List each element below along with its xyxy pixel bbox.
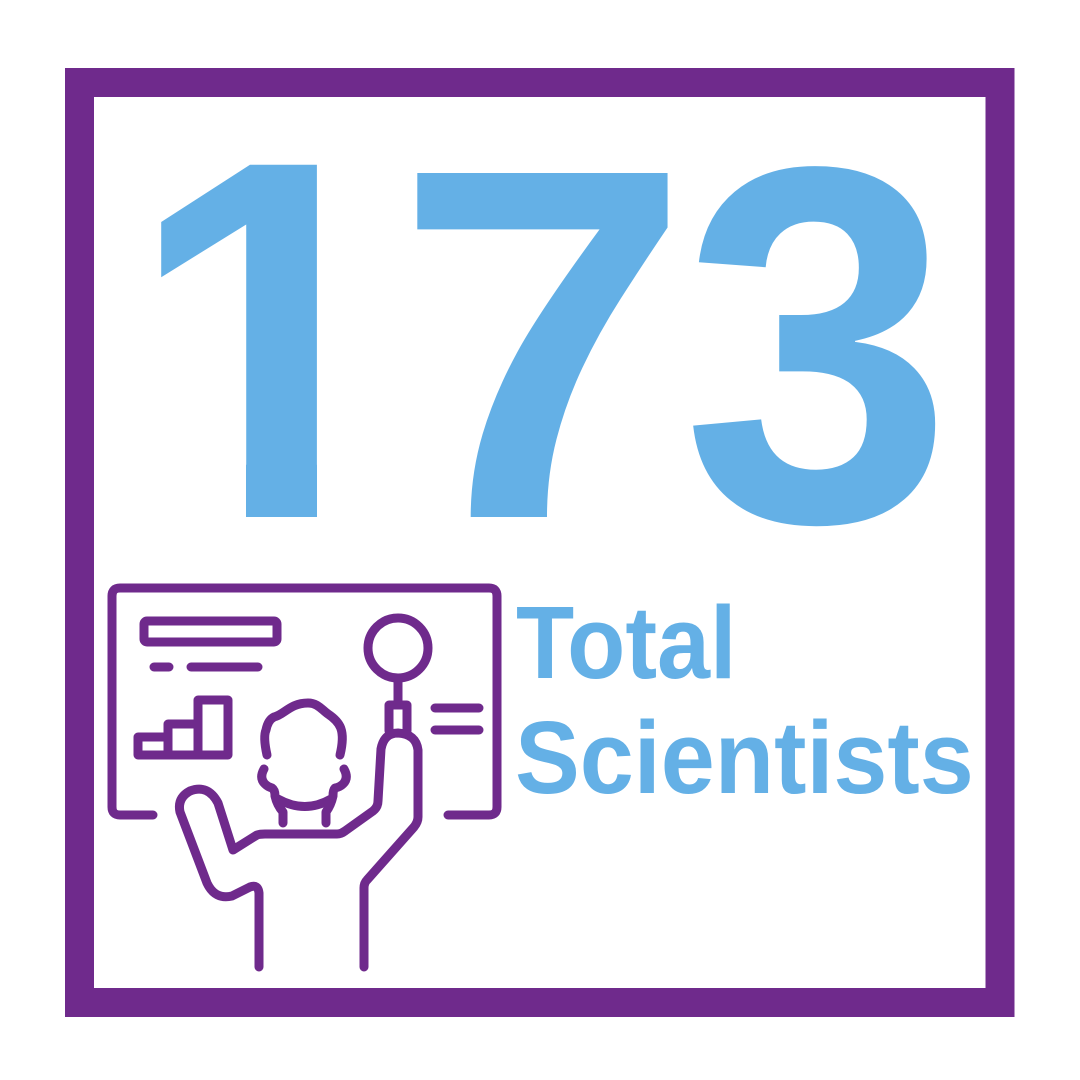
bar chart xyxy=(138,700,228,755)
board outline xyxy=(112,588,497,815)
board title bar xyxy=(144,621,277,642)
big number: 173: 1 xyxy=(126,53,412,626)
icon: scientist presenting at a board xyxy=(112,588,497,967)
big number: 173: 3 xyxy=(682,62,953,629)
big number: 173 xyxy=(126,53,953,629)
side text lines xyxy=(435,708,479,730)
person hair xyxy=(265,703,342,755)
person ears and jaw xyxy=(262,769,346,823)
board text lines xyxy=(154,662,258,672)
label: Total Scientists xyxy=(515,586,974,816)
magnifier handle xyxy=(389,680,407,731)
magnifier lens xyxy=(368,618,428,678)
big number: 173: 7 xyxy=(394,64,691,623)
label: Total Scientists: Total xyxy=(516,586,736,701)
person arms and torso xyxy=(179,733,418,967)
panel: purple framed border xyxy=(80,82,1000,1002)
label: Total Scientists: Scientists xyxy=(515,700,974,816)
